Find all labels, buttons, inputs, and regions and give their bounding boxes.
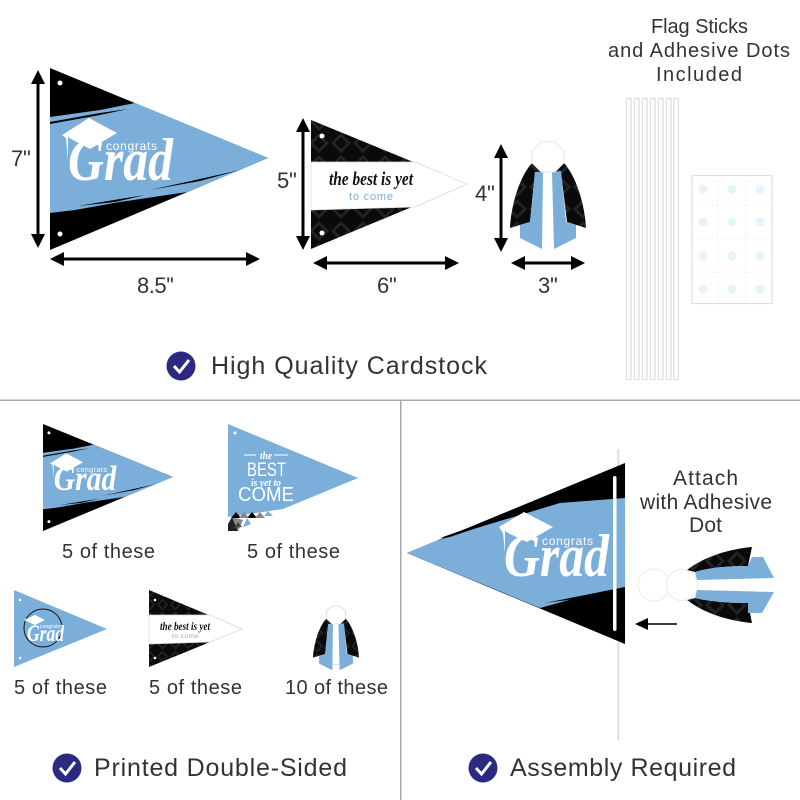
- flag: assembled pennant: [407, 463, 625, 644]
- heading: flag sticks and adhesive dots: and Adhesive Dots: [608, 40, 790, 62]
- dimension: 3 inch width: 3'': [538, 273, 558, 298]
- flag: small the best is yet: to come: [172, 633, 198, 640]
- tassel: graduation stole: [510, 142, 586, 249]
- flag: the best is yet to come blue: BEST: [247, 460, 286, 481]
- flag: assembled pennant: Grad: [504, 523, 610, 589]
- flag: large congrats grad pennant: [50, 68, 268, 250]
- dimension: 7 inch height: [11, 70, 45, 248]
- flag: small the best is yet: [149, 590, 242, 667]
- tassel: small stole: [313, 606, 359, 670]
- flag: small congrats grad: Grad: [54, 458, 117, 498]
- feature: assembly required: Assembly Required: [510, 754, 736, 782]
- tassel: rotated stole with adhesive dots: [638, 547, 774, 623]
- heading: flag sticks and adhesive dots: Included: [656, 64, 742, 86]
- flag: medium the best is yet to come pennant: the best is yet: [329, 169, 414, 190]
- feature: high quality cardstock: High Quality Cardstock: [211, 352, 488, 380]
- label: 5 of these: 5 of these: [62, 541, 155, 563]
- flag: round badge congrats grad: congrats: [40, 624, 60, 630]
- dimension: 6 inch width: [313, 256, 459, 298]
- heading: attach with adhesive dot: [639, 467, 772, 537]
- dimension: 5 inch height: [277, 118, 310, 250]
- label: 5 of these: 5 of these: [149, 677, 242, 699]
- label: 5 of these: 5 of these: [14, 677, 107, 699]
- flag stick: gray upright: [617, 449, 620, 740]
- flag: assembled pennant: congrats: [542, 534, 593, 548]
- heading: flag sticks and adhesive dots: [608, 16, 790, 86]
- flag: the best is yet to come blue: the: [260, 450, 272, 462]
- label: 5 of these: 5 of these: [247, 541, 340, 563]
- heading: attach with adhesive dot: Attach: [673, 467, 738, 490]
- heading: flag sticks and adhesive dots: Flag Sticks: [651, 16, 748, 38]
- flag: small congrats grad: [43, 424, 173, 531]
- flag: the best is yet to come blue: COME: [238, 484, 294, 506]
- heading: attach with adhesive dot: with Adhesive: [639, 491, 772, 514]
- adhesive dot sheet: [692, 176, 772, 304]
- label: 10 of these: 10 of these: [285, 677, 388, 699]
- flag: round badge congrats grad: Grad: [27, 621, 64, 646]
- flag: medium the best is yet to come pennant: [311, 120, 467, 249]
- feature: printed double-sided: Printed Double-Sided: [94, 754, 347, 782]
- heading: attach with adhesive dot: Dot: [689, 514, 722, 537]
- flag: small congrats grad: congrats: [76, 466, 107, 474]
- dimension: 8.5 inch width: 8.5'': [137, 273, 174, 298]
- dimension: 5 inch height: 5'': [277, 168, 297, 193]
- dimension: 6 inch width: 6'': [377, 273, 397, 298]
- flag: the best is yet to come blue: [228, 424, 358, 531]
- arrow: attach direction: [635, 618, 677, 630]
- dimension: 4 inch height: [475, 144, 508, 252]
- flag sticks: [626, 98, 678, 380]
- dimension: 8.5 inch width: [50, 252, 260, 298]
- dimension: 3 inch width: [511, 256, 585, 298]
- dimension: 4 inch height: 4'': [475, 181, 495, 206]
- flag: round badge congrats grad: [14, 590, 107, 667]
- flag: medium the best is yet to come pennant: to come: [349, 191, 393, 203]
- flag: large congrats grad pennant: Grad: [68, 127, 174, 193]
- flag: small the best is yet: the best is yet: [160, 619, 211, 633]
- flag: large congrats grad pennant: congrats: [106, 139, 157, 153]
- flag: the best is yet to come blue: is yet to: [251, 478, 281, 489]
- dimension: 7 inch height: 7'': [11, 146, 31, 171]
